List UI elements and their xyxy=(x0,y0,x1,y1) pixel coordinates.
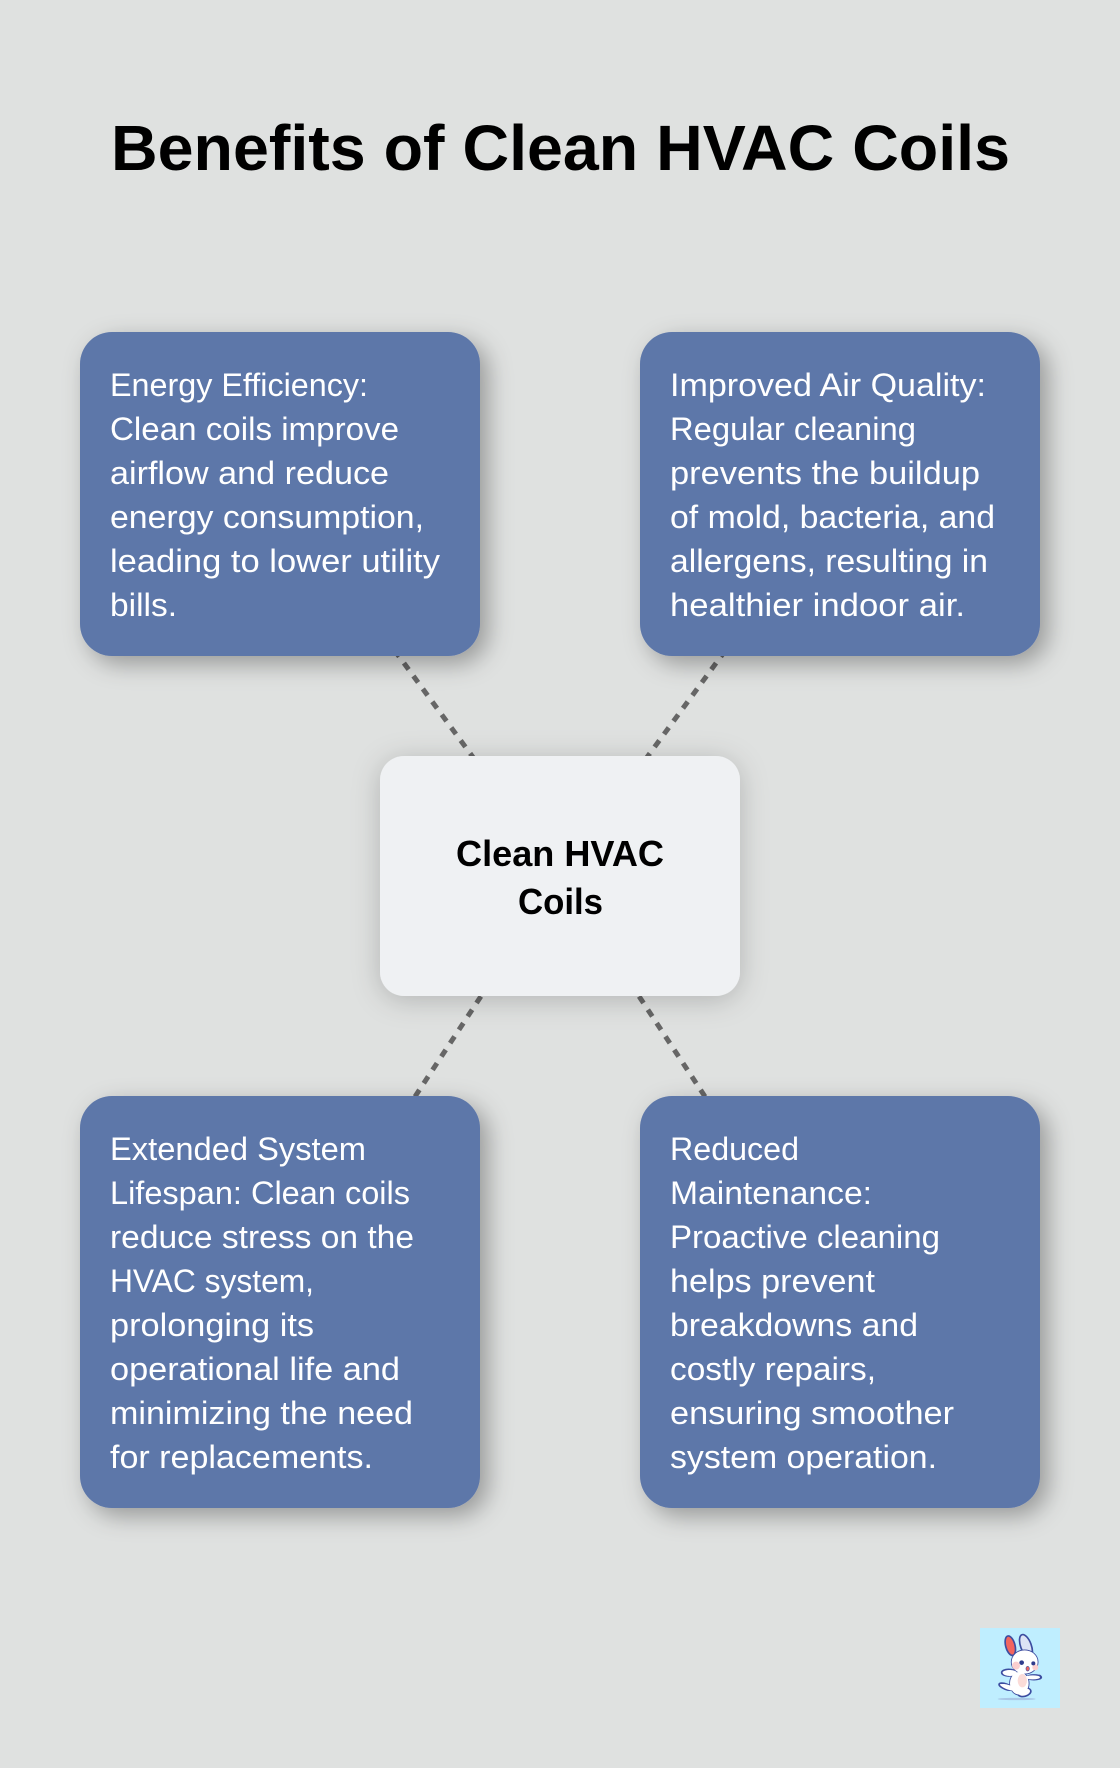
title: Benefits of Clean HVAC Coils xyxy=(111,112,1010,184)
text block: extended system lifespan: Extended System xyxy=(110,1131,366,1167)
panel: improved air quality xyxy=(640,332,1040,656)
text block: extended system lifespan: Lifespan: Clean coils xyxy=(110,1175,410,1211)
panel: reduced maintenance xyxy=(640,1096,1040,1508)
text block: extended system lifespan xyxy=(110,1131,414,1475)
text block: reduced maintenance: Reduced xyxy=(670,1131,799,1167)
text block: reduced maintenance: ensuring smoother xyxy=(670,1395,954,1431)
text block: energy efficiency: energy consumption, xyxy=(110,499,424,535)
text block: extended system lifespan: prolonging its xyxy=(110,1307,314,1343)
icon: running rabbit logo xyxy=(980,1628,1060,1708)
text block: improved air quality: healthier indoor air. xyxy=(670,587,965,623)
text block: improved air quality xyxy=(670,367,995,623)
text block: energy efficiency: Energy Efficiency: xyxy=(110,367,368,403)
text block: energy efficiency xyxy=(110,367,440,623)
text block: improved air quality: allergens, resulting in xyxy=(670,543,988,579)
hub label xyxy=(456,833,664,922)
hub label: Clean HVAC xyxy=(456,833,664,874)
panel: central hub xyxy=(380,756,740,996)
connector: hub to extended system lifespan xyxy=(280,876,560,1302)
text block: reduced maintenance: Proactive cleaning xyxy=(670,1219,940,1255)
text block: energy efficiency: bills. xyxy=(110,587,177,623)
connector: hub to improved air quality xyxy=(560,494,840,876)
text block: extended system lifespan: for replacements. xyxy=(110,1439,373,1475)
hub label: Coils xyxy=(518,881,603,922)
text block: energy efficiency: airflow and reduce xyxy=(110,455,389,491)
text block: reduced maintenance: costly repairs, xyxy=(670,1351,876,1387)
panel: energy efficiency xyxy=(80,332,480,656)
connector: hub to energy efficiency xyxy=(280,494,560,876)
text block: extended system lifespan: operational life and xyxy=(110,1351,400,1387)
text block: energy efficiency: leading to lower utility xyxy=(110,543,440,579)
text block: reduced maintenance: Maintenance: xyxy=(670,1175,872,1211)
text block: extended system lifespan: HVAC system, xyxy=(110,1263,314,1299)
panel: extended system lifespan xyxy=(80,1096,480,1508)
text block: reduced maintenance xyxy=(670,1131,954,1475)
text block: improved air quality: Improved Air Quality: xyxy=(670,367,986,403)
connector: hub to reduced maintenance xyxy=(560,876,840,1302)
text block: improved air quality: prevents the buildup xyxy=(670,455,980,491)
text block: reduced maintenance: helps prevent xyxy=(670,1263,875,1299)
text block: energy efficiency: Clean coils improve xyxy=(110,411,399,447)
text block: reduced maintenance: system operation. xyxy=(670,1439,937,1475)
text block: improved air quality: Regular cleaning xyxy=(670,411,916,447)
text block: extended system lifespan: reduce stress on the xyxy=(110,1219,414,1255)
text block: extended system lifespan: minimizing the need xyxy=(110,1395,413,1431)
text block: improved air quality: of mold, bacteria, and xyxy=(670,499,995,535)
text block: reduced maintenance: breakdowns and xyxy=(670,1307,918,1343)
